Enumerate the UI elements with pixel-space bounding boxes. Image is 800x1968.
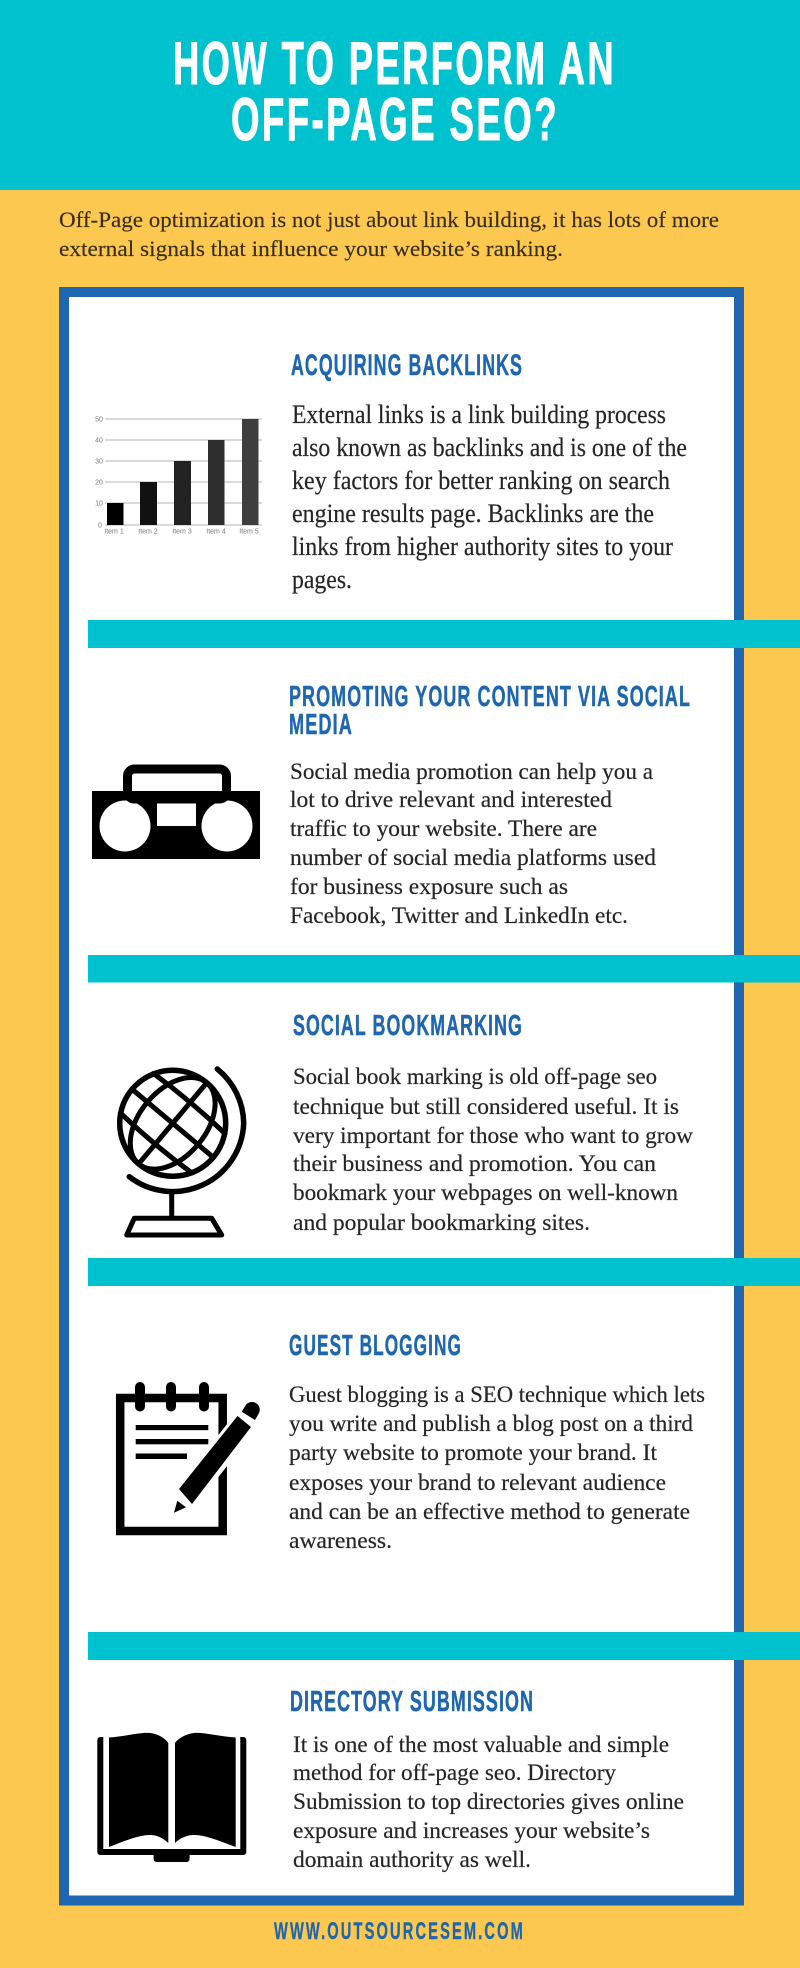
body text: social bookmarking: Social book marking is old off-page seo [293, 1064, 657, 1089]
footer url: WWW.OUTSOURCESEM.COM [274, 1918, 525, 1945]
body text: guest blogging [289, 1382, 705, 1553]
icon: open book [97, 1733, 246, 1862]
body text: directory submission [293, 1732, 684, 1872]
title: OFF-PAGE SEO? [231, 86, 559, 153]
bar chart: 30 [95, 458, 103, 466]
body text: social media [290, 759, 657, 928]
heading: social bookmarking: SOCIAL BOOKMARKING [293, 1010, 523, 1042]
body text: directory submission: Submission to top directories gives online [293, 1789, 684, 1814]
heading: promoting your content via social media: MEDIA [289, 709, 353, 741]
bar chart: Item 4 [206, 528, 226, 536]
bar chart: Item 3 [172, 528, 192, 536]
body text: social bookmarking: very important for those who want to grow [293, 1123, 693, 1148]
body text: social media: for business exposure such as [290, 874, 568, 899]
intro text [59, 207, 719, 261]
heading: promoting your content via social media [289, 681, 691, 741]
icon: boombox [92, 769, 260, 859]
body text: acquiring backlinks: links from higher authority sites to your [292, 531, 673, 561]
bar chart: 20 [95, 480, 103, 486]
header band [0, 0, 800, 190]
heading: guest blogging: GUEST BLOGGING [289, 1330, 462, 1362]
section: social bookmarking [98, 1010, 693, 1235]
heading: directory submission: DIRECTORY SUBMISSION [290, 1686, 534, 1718]
body text: guest blogging: you write and publish a blog post on a third [289, 1411, 693, 1436]
divider band 3 [88, 1258, 800, 1286]
panel: content frame [64, 292, 739, 1900]
body text: social bookmarking: and popular bookmarking sites. [293, 1210, 590, 1235]
body text: social bookmarking: technique but still considered useful. It is [293, 1094, 679, 1119]
bar chart [95, 416, 262, 536]
body text: guest blogging: awareness. [289, 1528, 392, 1553]
divider band 1 [88, 620, 800, 648]
bar chart: 50 [95, 416, 103, 424]
body text: guest blogging: exposes your brand to relevant audience [289, 1470, 666, 1495]
section: acquiring backlinks [95, 349, 687, 594]
heading: acquiring backlinks: ACQUIRING BACKLINKS [291, 349, 523, 382]
body text: directory submission: It is one of the most valuable and simple [293, 1732, 669, 1757]
body text: social media: number of social media platforms used [290, 845, 657, 870]
body text: directory submission: exposure and increases your website’s [293, 1818, 650, 1843]
body text: acquiring backlinks: External links is a link building process [292, 399, 666, 429]
body text: guest blogging: Guest blogging is a SEO technique which lets [289, 1382, 705, 1407]
icon: globe [98, 1049, 247, 1235]
body text: social media: traffic to your website. There are [290, 816, 597, 841]
body text: social media: Social media promotion can help you a [290, 759, 653, 784]
bar chart: 0 [98, 522, 102, 530]
section: guest blogging [120, 1330, 705, 1553]
intro text: Off-Page optimization is not just about link building, it has lots of more [59, 207, 719, 232]
body text: social media: Facebook, Twitter and LinkedIn etc. [290, 903, 628, 928]
bar chart: 10 [95, 500, 103, 508]
body text: social bookmarking: their business and promotion. You can [293, 1151, 657, 1176]
bar chart: Item 5 [239, 528, 259, 536]
divider band 4 [88, 1632, 800, 1660]
body text: directory submission: domain authority as well. [293, 1847, 531, 1872]
bar chart: Item 1 [104, 528, 124, 536]
body text: acquiring backlinks: also known as backlinks and is one of the [292, 432, 687, 462]
body text: acquiring backlinks: key factors for better ranking on search [292, 465, 670, 495]
body text: guest blogging: party website to promote your brand. It [289, 1440, 658, 1465]
body text: social bookmarking [293, 1064, 693, 1235]
body text: directory submission: method for off-page seo. Directory [293, 1760, 616, 1785]
divider band 2 [88, 955, 800, 982]
body text: social bookmarking: bookmark your webpages on well-known [293, 1180, 678, 1205]
section: directory submission [97, 1686, 684, 1872]
intro text: external signals that influence your website’s ranking. [59, 236, 563, 261]
body text: guest blogging: and can be an effective method to generate [289, 1499, 690, 1524]
body text: acquiring backlinks [292, 399, 687, 594]
body text: social media: lot to drive relevant and interested [290, 787, 613, 812]
bar chart: Item 2 [138, 528, 158, 536]
icon: notepad and pencil [120, 1387, 260, 1531]
title [173, 30, 616, 153]
bar chart: 40 [95, 438, 103, 444]
section: promoting content via social media [92, 681, 691, 928]
body text: acquiring backlinks: pages. [292, 564, 352, 594]
body text: acquiring backlinks: engine results page. Backlinks are the [292, 498, 654, 528]
